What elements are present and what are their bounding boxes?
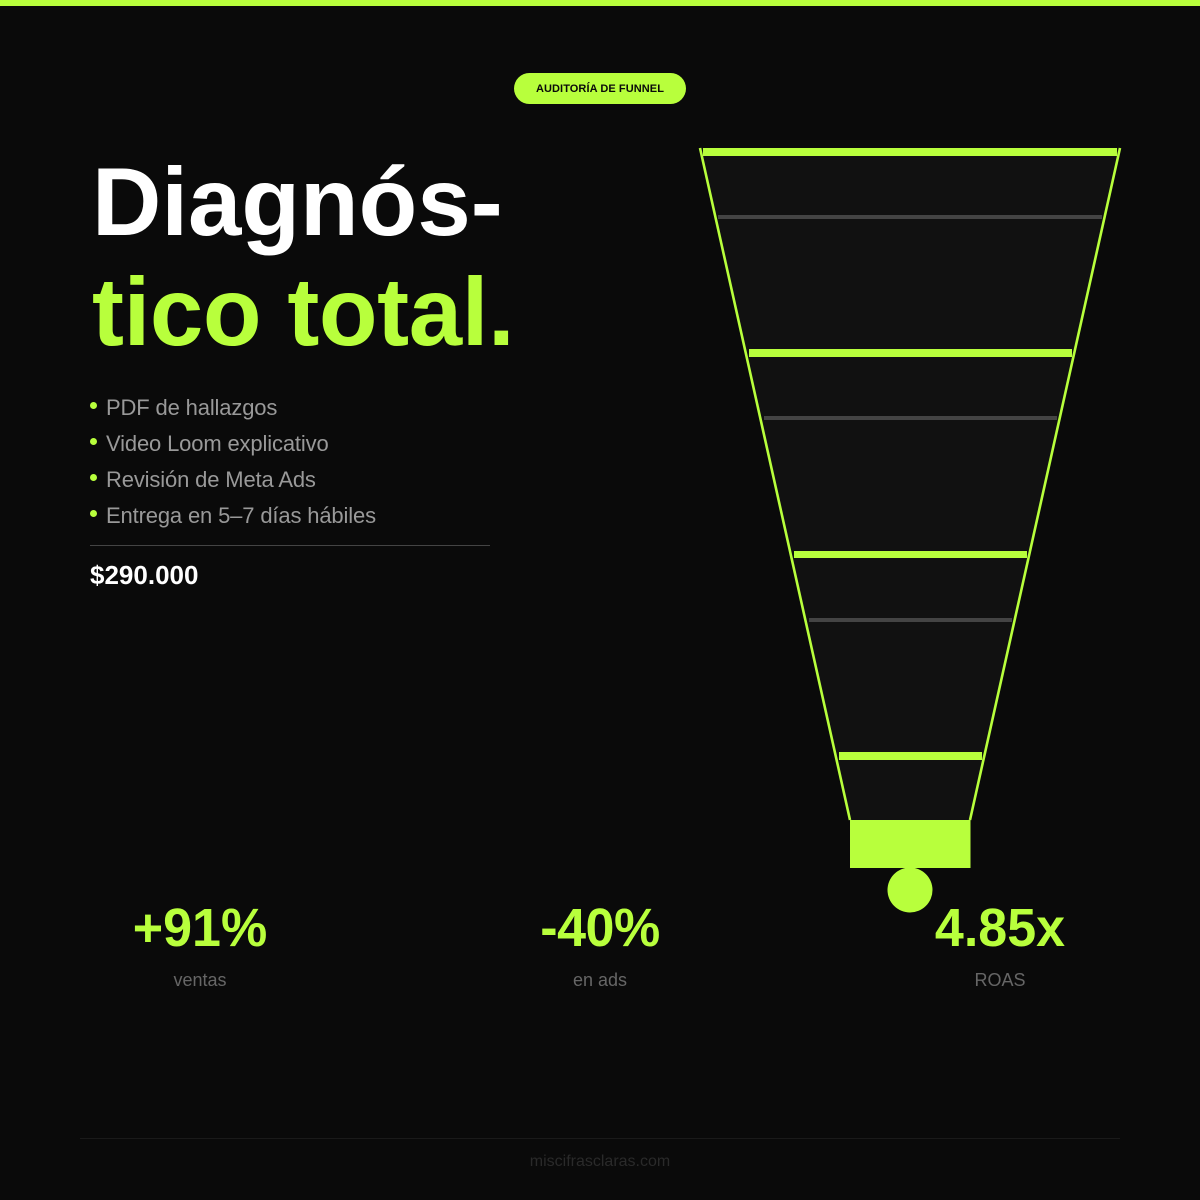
- stat: ventas: +91%: [133, 899, 267, 958]
- stat: ads: [540, 899, 660, 990]
- badge: AUDITORÍA DE FUNNEL: [536, 83, 664, 95]
- badge: [514, 73, 686, 104]
- stat: ads: en ads: [573, 970, 627, 990]
- feature list: [90, 395, 376, 528]
- title line 1: Diagnós-: [92, 148, 503, 256]
- footer: miscifrasclaras.com: [530, 1153, 670, 1170]
- price: $290.000: [90, 560, 198, 590]
- stat: ROAS: 4.85x: [935, 899, 1065, 958]
- level bars: [703, 148, 1117, 760]
- funnel body: [700, 148, 1120, 820]
- item: Meta Ads: Revisión de Meta Ads: [106, 467, 316, 492]
- title: [92, 148, 514, 366]
- item: delivery: Entrega en 5–7 días hábiles: [106, 503, 376, 528]
- drop: [888, 868, 932, 912]
- title line 2: tico total.: [92, 258, 514, 366]
- stat: ROAS: ROAS: [974, 970, 1026, 990]
- stat: ROAS: [935, 899, 1065, 990]
- stat: ads: -40%: [540, 899, 660, 958]
- stat: ventas: [133, 899, 267, 990]
- stat: ventas: ventas: [173, 970, 227, 990]
- item: PDF: PDF de hallazgos: [106, 395, 277, 420]
- funnel spout: [850, 820, 970, 868]
- top accent bar: [0, 0, 1200, 6]
- item: Loom: Video Loom explicativo: [106, 431, 329, 456]
